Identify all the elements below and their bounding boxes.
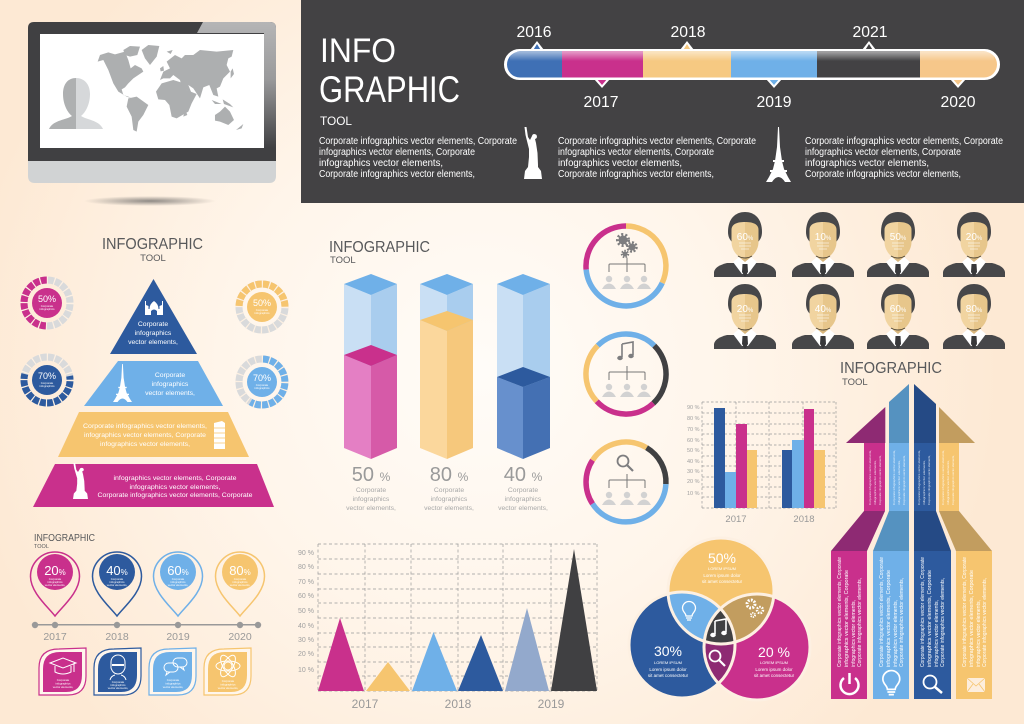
venn label 20	[754, 644, 795, 678]
dark blue arrow text: infographics vector elements,	[934, 600, 940, 667]
pin 20: vector elements,	[45, 583, 65, 587]
pin timeline years	[43, 631, 252, 643]
yellow arrow: infographics vector elements,	[946, 460, 950, 505]
year labels: 2021	[852, 24, 888, 41]
venn label 20: Lorem ipsum dolor	[755, 667, 793, 672]
pyramid tier 4: infographics vector elements,	[130, 484, 221, 491]
triangle chart	[298, 544, 597, 711]
dark blue arrow text	[920, 557, 946, 667]
pin 40: Corporate	[111, 577, 124, 581]
3D bar 50 percent: vector elements,	[346, 505, 396, 512]
pyramid tier 2: vector elements,	[145, 390, 195, 397]
light blue arrow: infographics vector elements,	[897, 460, 901, 505]
arrows heading: INFOGRAPHIC	[840, 360, 942, 377]
person 20: 20%	[966, 232, 983, 243]
gauge: yellow 50: 50%	[253, 298, 271, 308]
icon: eiffel tower	[766, 127, 791, 182]
gauge: magenta 50: 50%	[38, 294, 56, 304]
icon: power	[840, 673, 858, 694]
triangle chart axis: 70 %	[298, 579, 314, 586]
timeline bar	[505, 24, 999, 111]
panel: arrows	[831, 360, 992, 699]
main title: GRAPHIC	[319, 69, 460, 110]
3D bar 40 percent: Corporate	[508, 487, 538, 494]
year labels: 2020	[940, 94, 976, 111]
pyramid tier 2	[84, 361, 223, 406]
pyramid tier 2: Corporate	[155, 372, 185, 379]
3D bar 50 percent: infographics	[353, 496, 390, 503]
person 60: 60%	[737, 232, 754, 243]
ring 3: magnifier	[586, 442, 666, 522]
gauge: magenta 50: infographics	[39, 307, 55, 311]
main title	[319, 32, 460, 128]
bar chart axis labels: 10 %	[687, 491, 700, 497]
tile: graduation cap: Corporate	[57, 678, 70, 682]
triangle chart axis	[298, 550, 314, 674]
person 20	[943, 212, 1005, 277]
pin timeline	[32, 622, 261, 628]
bar chart axis labels: 90 %	[687, 405, 700, 411]
dark blue arrow: infographics vector elements,	[922, 460, 926, 505]
year labels: 2019	[756, 94, 792, 111]
pins heading: INFOGRAPHIC	[34, 533, 95, 544]
magenta arrow: infographics vector elements,	[873, 460, 877, 505]
gauge: dark blue 70	[24, 357, 70, 403]
pin 40: vector elements,	[107, 583, 127, 587]
3D bars heading: INFOGRAPHIC	[329, 239, 430, 256]
magenta arrow	[831, 407, 885, 699]
bar chart axis labels	[687, 405, 700, 497]
tile: graduation cap	[39, 648, 86, 695]
venn label 20: LOREM IPSUM	[760, 660, 788, 665]
bar chart year labels: 2018	[793, 514, 815, 525]
venn circles	[629, 538, 810, 700]
pin 80: 80%	[229, 563, 251, 578]
text block three: infographics vector elements,	[805, 158, 929, 169]
gauge: yellow 50: Corporate	[256, 308, 269, 312]
icon: magnifier	[924, 676, 942, 693]
venn label 50: LOREM IPSUM	[708, 566, 736, 571]
monitor bezel	[28, 22, 276, 161]
text block three: Corporate infographics vector elements, Corporate	[805, 136, 1003, 147]
light blue arrow text: Corporate infographics vector elements,	[899, 578, 905, 667]
year labels: 2017	[584, 94, 619, 111]
pyramid tier 3	[58, 412, 249, 457]
yellow arrow text	[962, 557, 988, 667]
yellow arrow text: infographics vector elements,	[976, 600, 982, 667]
3D bar 50 percent: Corporate	[356, 487, 386, 494]
header panel	[301, 0, 1024, 203]
dark blue arrow: Corporate infographics vector elements,	[917, 450, 921, 505]
text block one: Corporate infographics vector elements,	[319, 169, 475, 180]
gauge: dark blue 70: Corporate	[41, 381, 54, 385]
pins heading: TOOL	[34, 544, 49, 550]
light blue arrow text	[879, 557, 905, 667]
pin 20	[30, 552, 79, 616]
gauge: yellow 50: infographics	[254, 311, 270, 315]
pyramid tier 3: infographics vector elements,	[100, 441, 190, 448]
tile: speech bubbles: infographics	[165, 682, 181, 686]
person 20 second row	[714, 284, 776, 349]
triangle chart axis: 60 %	[298, 593, 314, 600]
panel: 3D bars	[329, 239, 550, 512]
3D bars heading	[329, 239, 430, 266]
gauge: light blue 70: 70%	[253, 373, 271, 383]
3D bar 80 percent: Corporate	[434, 487, 464, 494]
icon: venn music	[710, 619, 727, 637]
triangles	[318, 549, 597, 691]
triangle chart years: 2019	[538, 697, 565, 711]
3D bar 40 percent: infographics	[505, 496, 542, 503]
venn label 50: sit amet consectetur	[702, 579, 743, 584]
pyramid tier 4: infographics vector elements, Corporate	[114, 475, 237, 482]
venn label 30	[648, 643, 689, 678]
icon: envelope	[967, 678, 985, 692]
pin 80: infographics	[232, 580, 248, 584]
bars 2018	[782, 409, 825, 508]
pin 60: Corporate	[172, 577, 185, 581]
triangle chart axis: 50 %	[298, 608, 314, 615]
light blue arrow: Corporate infographics vector elements,	[902, 455, 906, 505]
ring 1: gears	[586, 226, 666, 306]
bar chart year labels	[725, 514, 815, 525]
magenta arrow text: Corporate infographics vector elements,	[857, 578, 863, 667]
pin 20: 20%	[44, 563, 66, 578]
triangle chart axis: 90 %	[298, 550, 314, 557]
person 60	[714, 212, 776, 277]
bars 2017	[714, 408, 757, 508]
bezel highlight	[197, 22, 276, 148]
pins heading	[34, 533, 95, 550]
panel: pyramid	[24, 236, 285, 507]
gauge: yellow 50	[239, 284, 285, 330]
3D bar 50 percent: 50 %	[352, 464, 391, 486]
panel: org rings	[586, 226, 666, 522]
bar chart axis labels: 70 %	[687, 427, 700, 433]
gauge: magenta 50: Corporate	[41, 304, 54, 308]
3D bar 40 percent: 40 %	[504, 464, 543, 486]
pyramid tier 3: Corporate infographics vector elements,	[83, 423, 207, 430]
pin 60	[153, 552, 203, 616]
bar segments	[507, 52, 562, 78]
yellow arrow: Corporate infographics vector elements,	[951, 455, 955, 505]
magenta arrow text: infographics vector elements,	[851, 600, 857, 667]
bar chart axis labels: 60 %	[687, 438, 700, 444]
bar frame	[505, 50, 999, 79]
pin timeline years: 2017	[43, 631, 67, 643]
gauge: magenta 50	[24, 280, 70, 326]
pin 40: infographics	[109, 580, 125, 584]
pin 20: Corporate	[49, 577, 62, 581]
magenta arrow: Corporate infographics vector elements,	[868, 450, 872, 505]
light blue arrow text: infographics vector elements, Corporate	[886, 570, 892, 667]
venn label 50	[702, 550, 743, 584]
tile: head with glasses: Corporate	[112, 680, 125, 684]
person 80: 80%	[966, 304, 983, 315]
venn label 20: sit amet consectetur	[754, 673, 795, 678]
year labels: 2016	[516, 24, 552, 41]
person 40: 40%	[815, 304, 832, 315]
monitor with world map	[28, 22, 276, 206]
text block two: infographics vector elements, Corporate	[558, 147, 714, 158]
pyramid tier 4	[33, 463, 274, 507]
gauge: light blue 70: Corporate	[256, 383, 269, 387]
person 50	[867, 212, 929, 277]
3D bar 80 percent	[420, 274, 474, 512]
world map	[98, 45, 243, 132]
triangle chart years: 2017	[352, 697, 379, 711]
pin timeline years: 2020	[228, 631, 252, 643]
text block three: Corporate infographics vector elements,	[805, 169, 961, 180]
venn label 30: Lorem ipsum dolor	[649, 667, 687, 672]
pin 80: vector elements,	[230, 583, 250, 587]
tile: graduation cap: vector elements,	[53, 685, 73, 689]
magenta arrow text	[837, 557, 863, 667]
venn label 30: LOREM IPSUM	[654, 660, 682, 665]
yellow arrow: Corporate infographics vector elements,	[941, 450, 945, 505]
tile: atom: Corporate	[222, 679, 235, 683]
pyramid tier 3: infographics vector elements, Corporate	[84, 432, 206, 439]
monitor chin	[28, 160, 276, 183]
magenta arrow: Corporate infographics vector elements,	[878, 455, 882, 505]
pin 60: infographics	[170, 580, 186, 584]
person 20 second row: 20%	[737, 304, 754, 315]
person 10: 10%	[815, 232, 832, 243]
tile: graduation cap: infographics	[55, 682, 71, 686]
monitor shadow	[84, 196, 216, 206]
yellow arrow	[939, 407, 992, 699]
icon: statue of liberty	[524, 127, 542, 179]
bar chart	[687, 402, 836, 525]
3D bar 80 percent: vector elements,	[424, 505, 474, 512]
triangle chart axis: 10 %	[298, 667, 314, 674]
light blue arrow	[873, 384, 909, 699]
gauge: dark blue 70: infographics	[39, 384, 55, 388]
gauge: light blue 70	[239, 359, 285, 405]
venn diagram	[629, 538, 810, 700]
pin 60: 60%	[167, 563, 189, 578]
panel: people grid	[714, 212, 1005, 349]
triangle chart axis: 40 %	[298, 623, 314, 630]
text block one	[319, 136, 517, 180]
text block one: infographics vector elements, Corporate	[319, 147, 475, 158]
text block two	[558, 136, 756, 180]
person silhouette	[49, 78, 103, 129]
venn label 20: 20 %	[758, 644, 790, 660]
gauge: dark blue 70: 70%	[38, 371, 56, 381]
yellow arrow text: infographics vector elements, Corporate	[969, 570, 975, 667]
year labels	[516, 24, 976, 111]
pin 60: vector elements,	[168, 583, 188, 587]
3D bar 40 percent: vector elements,	[498, 505, 548, 512]
pyramid tier 1: vector elements,	[128, 339, 178, 346]
bar chart axis labels: 20 %	[687, 479, 700, 485]
text block three: infographics vector elements, Corporate	[805, 147, 961, 158]
screen	[40, 34, 264, 148]
bar chart axis labels: 50 %	[687, 448, 700, 454]
yellow arrow text: Corporate infographics vector elements,	[982, 578, 988, 667]
3D bar 80 percent: 80 %	[430, 464, 469, 486]
pyramid tier 4: Corporate infographics vector elements, Corporate	[98, 492, 253, 499]
person 10	[792, 212, 854, 277]
triangle chart axis: 30 %	[298, 637, 314, 644]
magenta arrow text: Corporate infographics vector elements, Corporate	[837, 557, 843, 667]
person 60 second row	[867, 284, 929, 349]
triangle chart years: 2018	[445, 697, 472, 711]
dark blue arrow text: infographics vector elements, Corporate	[927, 570, 933, 667]
triangle chart years	[352, 697, 565, 711]
person 40	[792, 284, 854, 349]
main title: TOOL	[320, 116, 353, 128]
dark blue arrow text: Corporate infographics vector elements,	[940, 578, 946, 667]
tile: speech bubbles	[149, 648, 196, 695]
tile: speech bubbles: vector elements,	[163, 685, 183, 689]
tile: head with glasses	[94, 648, 141, 695]
tile: atom: vector elements,	[218, 686, 238, 690]
light blue arrow text: infographics vector elements,	[893, 600, 899, 667]
main title: INFO	[320, 32, 396, 70]
pin timeline years: 2018	[105, 631, 129, 643]
pyramid heading: INFOGRAPHIC	[102, 236, 203, 253]
bar chart axis labels: 30 %	[687, 469, 700, 475]
text block two: Corporate infographics vector elements, Corporate	[558, 136, 756, 147]
dark blue arrow text: Corporate infographics vector elements, Corporate	[920, 557, 926, 667]
pin 80: Corporate	[234, 577, 247, 581]
pin timeline years: 2019	[166, 631, 190, 643]
venn label 30: 30%	[654, 643, 682, 659]
3D bar 50 percent	[344, 274, 397, 512]
bar chart axis labels: 80 %	[687, 416, 700, 422]
tile: atom	[204, 648, 251, 695]
pyramid tier 2: infographics	[152, 381, 189, 388]
year labels: 2018	[670, 24, 706, 41]
pyramid tier 1	[110, 279, 197, 354]
pointers	[530, 41, 876, 50]
text block one: infographics vector elements,	[319, 158, 443, 169]
pin 20: infographics	[47, 580, 63, 584]
person 60 second row: 60%	[890, 304, 907, 315]
tile: atom: infographics	[220, 682, 236, 686]
pin 40	[92, 552, 142, 616]
text block one: Corporate infographics vector elements, Corporate	[319, 136, 517, 147]
bar chart year labels: 2017	[725, 514, 747, 525]
yellow arrow text: Corporate infographics vector elements, Corporate	[962, 557, 968, 667]
light blue arrow text: Corporate infographics vector elements, Corporate	[879, 557, 885, 667]
header background	[301, 0, 1024, 203]
text block two: infographics vector elements,	[558, 158, 682, 169]
tile: speech bubbles: Corporate	[167, 678, 180, 682]
person 80	[943, 284, 1005, 349]
dark blue arrow: Corporate infographics vector elements,	[927, 455, 931, 505]
pyramid tier 1: Corporate	[138, 321, 168, 328]
person 50: 50%	[890, 232, 907, 243]
icon: venn bulb	[682, 602, 696, 620]
triangle chart axis: 80 %	[298, 564, 314, 571]
venn label 50: 50%	[708, 550, 736, 566]
dark blue arrow	[914, 384, 951, 699]
light blue arrow: Corporate infographics vector elements,	[892, 450, 896, 505]
panel: pins and tiles	[30, 533, 264, 695]
gauge: light blue 70: infographics	[254, 386, 270, 390]
pyramid heading	[102, 236, 203, 264]
arrows heading	[840, 360, 942, 388]
icon: venn gears	[747, 600, 763, 617]
arrows heading: TOOL	[842, 377, 868, 388]
text block two: Corporate infographics vector elements,	[558, 169, 714, 180]
pyramid heading: TOOL	[140, 253, 166, 264]
text block three	[805, 136, 1003, 180]
pyramid tier 1: infographics	[135, 330, 172, 337]
3D bar 80 percent: infographics	[431, 496, 468, 503]
icon: venn magnifier	[710, 650, 725, 666]
pin 80	[216, 552, 264, 616]
bar chart axis labels: 40 %	[687, 459, 700, 465]
3D bar 40 percent	[497, 274, 550, 512]
icon: bulb	[883, 671, 900, 695]
triangle chart axis: 20 %	[298, 651, 314, 658]
ring 2: music	[586, 334, 666, 414]
venn label 30: sit amet consectetur	[648, 673, 689, 678]
3D bars heading: TOOL	[330, 255, 356, 266]
magenta arrow text: infographics vector elements, Corporate	[844, 570, 850, 667]
tile: head with glasses: vector elements,	[108, 686, 128, 690]
tile: head with glasses: infographics	[110, 683, 126, 687]
pin 40: 40%	[106, 563, 128, 578]
venn label 50: Lorem ipsum dolor	[703, 573, 741, 578]
